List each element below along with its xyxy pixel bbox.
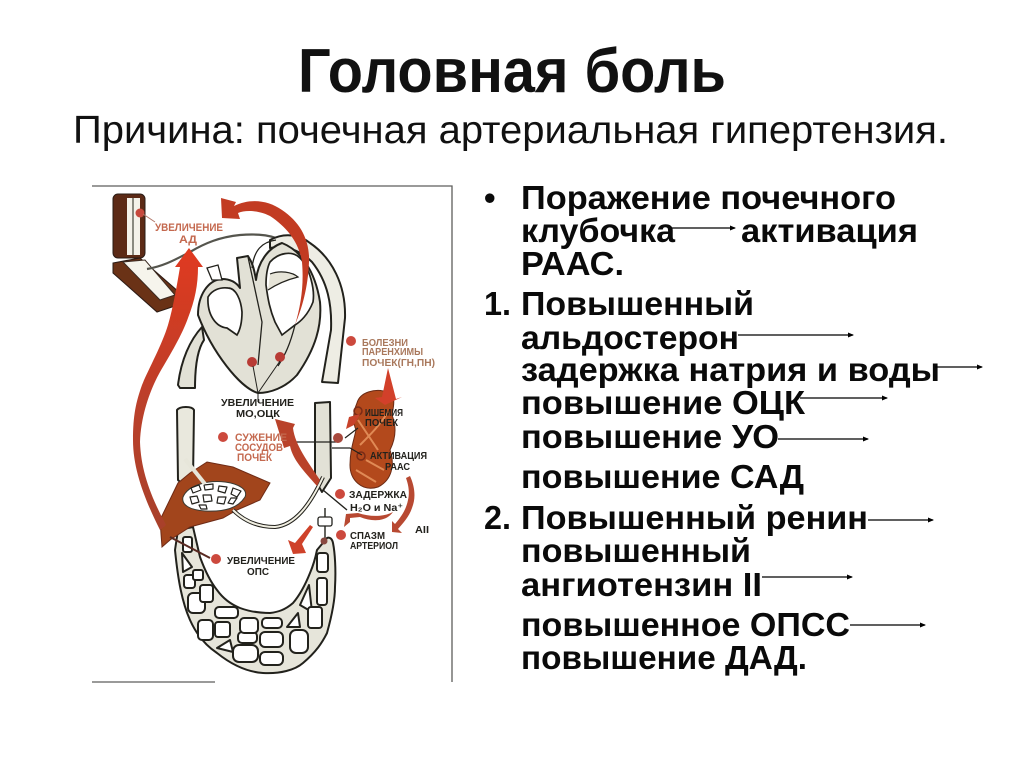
label: parenchyma disease: БОЛЕЗНИ [362,338,408,349]
label: water and sodium retention: ЗАДЕРЖКА [349,489,407,501]
text block: glomerular damage [484,179,918,282]
label: kidney ischaemia [365,407,403,429]
label: narrowing of renal vessels: ПОЧЕК [237,452,272,464]
label: water and sodium retention: H₂O и Na⁺ [350,502,403,514]
label: parenchyma disease: ПОЧЕК(ГН,ПН) [362,358,435,369]
aortic arch [270,235,345,383]
label: increased blood pressure [155,222,223,246]
text block: aldosterone pathway [484,285,982,495]
arrow: retention curve [344,512,393,527]
label: narrowing of renal vessels: СОСУДОВ [235,442,283,454]
label: RAAS activation [370,450,427,473]
text block: aldosterone pathway: повышение САД [521,458,804,495]
label: arteriolar spasm [336,530,398,552]
label: increased cardiac output [221,397,294,420]
label: parenchyma disease: ПАРЕНХИМЫ [362,347,423,358]
label: parenchyma disease [346,336,435,369]
text block: glomerular damage: РААС. [521,245,624,282]
heart [198,240,320,402]
text block: renin pathway [484,499,933,676]
text block: aldosterone pathway: повышение ОЦК [521,384,806,421]
dot: renal artery [333,433,343,443]
text block: aldosterone pathway: повышение УО [521,418,779,455]
text block: glomerular damage: активация [741,212,918,249]
label: narrowing of renal vessels [218,432,287,464]
arrow: RAAS to arterioles [392,476,414,533]
label: narrowing of renal vessels: СУЖЕНИЕ [235,432,287,444]
line: resistance label [170,537,210,558]
liver [160,459,270,547]
label: arteriolar spasm: АРТЕРИОЛ [350,540,398,552]
text block: renin pathway: 2. [484,499,511,536]
label: increased peripheral resistance [211,554,295,578]
icon: blood pressure monitor [113,194,180,312]
text block: renin pathway: Повышенный ренин [521,499,868,536]
left heart vessel [178,327,204,388]
text block: renin pathway: повышенный [521,532,751,569]
diagram frame [92,186,452,682]
arteriole connector [318,490,347,544]
text block: aldosterone pathway: Повышенный [521,285,754,322]
label: RAAS activation: РААС [385,461,410,473]
capillary bed [175,527,335,673]
text block: aldosterone pathway: 1. [484,285,511,322]
portal vein [233,477,323,527]
label: RAAS activation: АКТИВАЦИЯ [370,450,427,462]
label: water and sodium retention [335,489,407,514]
label: arteriolar spasm: СПАЗМ [350,530,385,542]
text block: renin pathway: повышение ДАД. [521,639,807,676]
label: increased cardiac output: МО,ОЦК [236,408,281,420]
panel: circulation diagram [92,186,452,682]
text block: glomerular damage: клубочка [521,212,676,249]
label: kidney ischaemia: ИШЕМИЯ [365,407,403,419]
label: angiotensin II: АII [415,524,429,536]
arrow: ischaemia small [346,414,360,429]
vena cava [177,407,206,497]
descending aorta [315,402,331,492]
text block: glomerular damage: Поражение почечного [521,179,896,216]
text block: glomerular damage: • [484,179,496,216]
arrow: red arrow from kidney to top [221,198,309,325]
title: Головная боль [298,37,726,106]
label: increased blood pressure: УВЕЛИЧЕНИЕ [155,222,223,234]
pressure tube [147,234,276,269]
text block: renin pathway: ангиотензин II [521,566,762,603]
label: increased peripheral resistance: УВЕЛИЧЕНИЕ [227,555,295,567]
label: increased peripheral resistance: ОПС [247,566,269,578]
text block: aldosterone pathway: альдостерон [521,319,739,356]
arrow: arterioles to resistance [288,525,313,554]
arrow: disease to kidney [375,368,402,405]
subtitle: Причина: почечная артериальная гипертензия. [73,109,948,152]
text block: renin pathway: повышенное ОПСС [521,606,850,643]
label: increased cardiac output: УВЕЛИЧЕНИЕ [221,397,294,409]
arrow: to renal vasoconstriction [275,419,320,486]
arrow: red arrow from liver to pressure monitor [133,248,203,530]
portal vein lumen [233,477,323,527]
renal vessels [283,428,362,455]
label: kidney ischaemia: ПОЧЕК [365,417,399,429]
text block: aldosterone pathway: задержка натрия и воды [521,351,940,388]
kidney [350,390,395,488]
label: increased blood pressure: АД [179,234,197,246]
